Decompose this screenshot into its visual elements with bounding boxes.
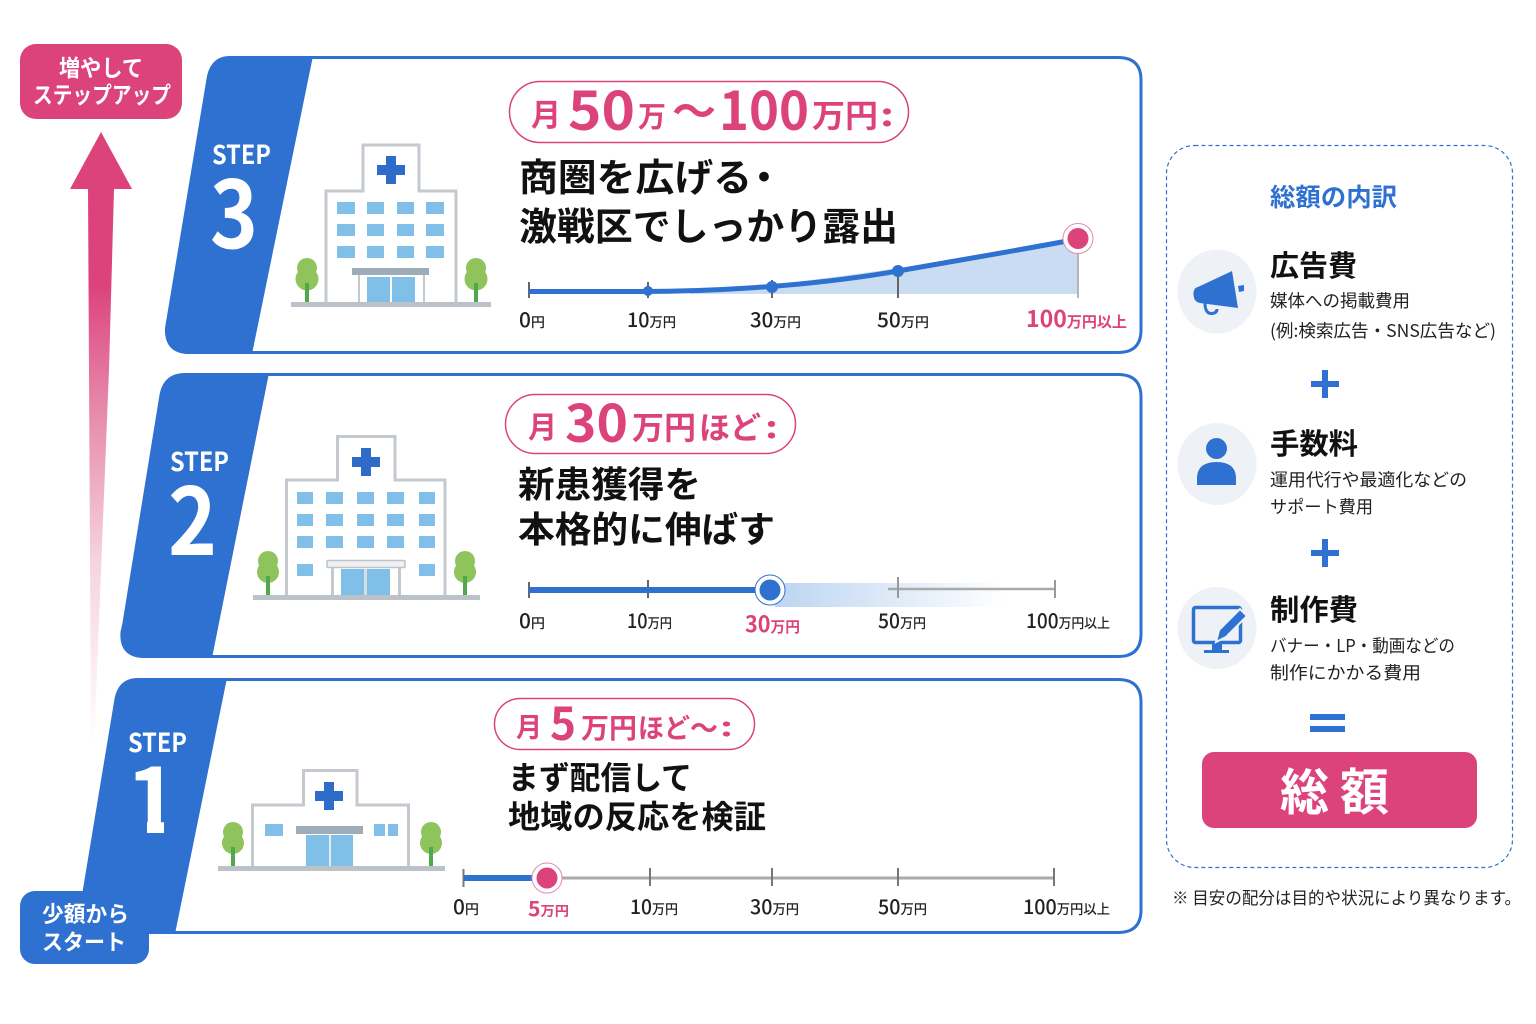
step 1 number: STEP — [128, 723, 187, 760]
panel: step 1 — [20, 678, 1141, 964]
budget pill: 月 — [531, 90, 561, 135]
area chart — [529, 224, 1093, 298]
label: step up — [20, 44, 182, 119]
budget pill: ～ — [672, 78, 716, 140]
axis labels: 50万円 — [877, 304, 929, 333]
footnote: ※ 目安の配分は目的や状況により異なります。 — [1172, 884, 1521, 909]
step 3 heading: ・ — [745, 147, 783, 202]
budget pill: : — [880, 90, 894, 136]
fees text: サポート費用 — [1270, 494, 1373, 519]
production text: 制作にかかる費用 — [1270, 660, 1421, 685]
ad cost text: (例:検索広告・SNS広告など) — [1270, 318, 1496, 343]
axis labels: 10万円 — [627, 304, 676, 333]
budget pill: 万 — [638, 94, 666, 136]
item: fees — [1178, 421, 1467, 519]
step 3 heading — [519, 147, 898, 251]
icon: hospital large — [291, 145, 491, 307]
step 2 number: STEP — [170, 442, 229, 479]
label: start small: スタート — [42, 925, 126, 957]
step 1 number: 1 — [126, 729, 179, 859]
production text: 制作費 — [1270, 587, 1358, 629]
icon: small clinic — [218, 770, 445, 871]
total box: 総 額 — [1280, 753, 1389, 825]
ad cost text: 広告費 — [1270, 243, 1357, 285]
axis labels — [519, 300, 1127, 334]
axis labels: 0円 — [453, 891, 479, 920]
step 1 blue band — [82, 678, 227, 934]
axis labels — [519, 605, 1110, 639]
fees text: 手数料 — [1270, 421, 1358, 463]
step 2 heading — [518, 456, 775, 553]
step 2 heading: 新患獲得を — [518, 456, 701, 508]
panel: step 2 — [121, 373, 1141, 658]
budget pill: ほど — [699, 403, 761, 448]
axis labels: 0円 — [519, 304, 545, 333]
icon: hospital medium — [253, 436, 480, 600]
step 1 heading: 地域の反応を検証 — [508, 792, 766, 838]
label: step up: 増やして — [59, 49, 143, 83]
dashed frame — [1166, 146, 1512, 868]
axis labels: 30万円 — [750, 304, 801, 333]
production text — [1270, 587, 1455, 685]
fees text: 運用代行や最適化などの — [1270, 467, 1467, 492]
budget pill: ～ — [690, 707, 718, 747]
budget pill: 50 — [568, 70, 635, 146]
equals — [1310, 714, 1345, 732]
axis labels: 10万円 — [630, 891, 678, 920]
budget pill: 万円 — [581, 707, 637, 747]
budget pill: ほど — [638, 707, 690, 746]
plus — [1311, 539, 1339, 567]
step 1 heading — [508, 753, 766, 838]
slider chart — [529, 575, 1055, 607]
arrow: growth upward — [70, 132, 132, 745]
ad cost text: 媒体への掲載費用 — [1270, 288, 1410, 313]
total box — [1202, 752, 1477, 828]
panel: total breakdown — [1166, 146, 1512, 868]
budget pill: 万円 — [812, 91, 878, 137]
fees text — [1270, 421, 1467, 519]
panel title: 総額の内訳 — [1270, 178, 1397, 214]
label: start small — [20, 891, 149, 964]
slider chart — [464, 863, 1054, 893]
axis labels: 30万円 — [745, 607, 800, 639]
budget pill: 5 — [550, 688, 576, 753]
card outline — [167, 58, 1141, 352]
axis labels: 100万円以上 — [1026, 605, 1110, 634]
budget pill: 30 — [565, 382, 628, 457]
step 2 number: 2 — [168, 447, 217, 582]
axis labels: 10万円 — [627, 605, 672, 634]
budget pill — [494, 688, 754, 753]
budget pill: 月 — [528, 403, 557, 447]
step 2 blue band — [121, 373, 269, 658]
card outline — [122, 374, 1141, 656]
axis labels: 50万円 — [878, 605, 926, 634]
axis labels — [453, 891, 1110, 922]
card outline — [86, 680, 1141, 932]
item: production cost — [1178, 587, 1455, 685]
step 3 number: 3 — [210, 140, 258, 275]
budget pill: : — [720, 707, 733, 744]
label: start small: 少額から — [42, 897, 129, 929]
axis labels: 0円 — [519, 605, 545, 634]
icon: megaphone — [1178, 250, 1256, 334]
panel: step 3 — [165, 56, 1141, 354]
budget pill — [510, 70, 908, 146]
axis labels: 50万円 — [878, 891, 927, 920]
plus — [1311, 370, 1339, 398]
budget pill: : — [765, 402, 778, 447]
axis labels: 5万円 — [528, 893, 569, 922]
label: step up: ステップアップ — [33, 76, 171, 110]
budget pill: 万円 — [632, 403, 696, 449]
budget pill: 月 — [516, 706, 542, 745]
step 3 heading: 商圏を広げる — [519, 147, 752, 202]
step 2 heading: 本格的に伸ばす — [518, 501, 775, 553]
step 3 blue band — [165, 56, 313, 354]
item: ad cost — [1178, 243, 1496, 343]
axis labels: 100万円以上 — [1026, 300, 1127, 334]
step 3 heading: 激戦区でしっかり露出 — [519, 196, 898, 251]
icon: monitor and pen — [1178, 587, 1256, 669]
budget pill: 100 — [719, 70, 809, 146]
production text: バナー・LP・動画などの — [1270, 633, 1455, 658]
budget pill — [506, 382, 796, 457]
step 1 heading: まず配信して — [508, 753, 692, 799]
icon: person — [1178, 423, 1256, 505]
axis labels: 30万円 — [750, 891, 799, 920]
step 3 number: STEP — [212, 135, 271, 172]
axis labels: 100万円以上 — [1023, 891, 1110, 920]
ad cost text — [1270, 243, 1496, 343]
